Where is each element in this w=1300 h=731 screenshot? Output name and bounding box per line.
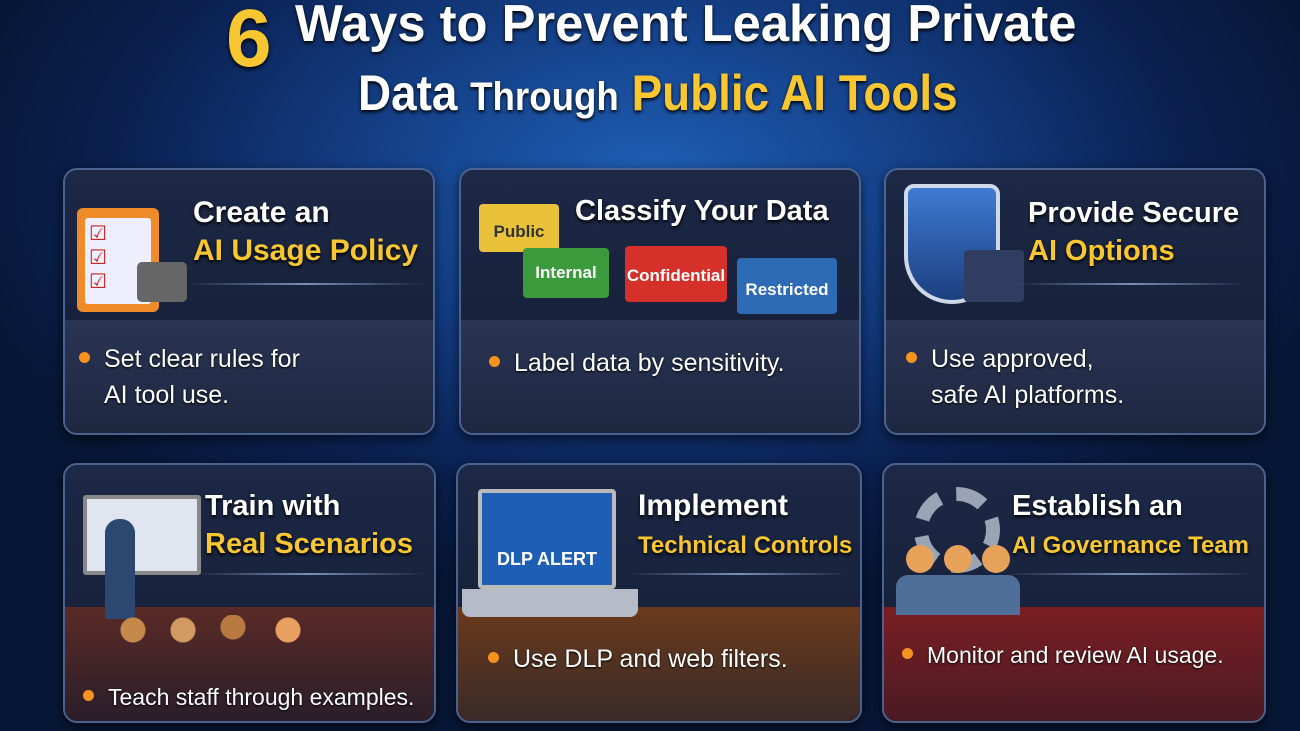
icon: folders: Internal (535, 263, 597, 282)
panel: secure AI options: Use approved, (931, 345, 1094, 373)
icon: folders (479, 204, 837, 314)
panel: governance team: Monitor and review AI usage. (927, 642, 1224, 668)
icon: shield (904, 184, 1024, 304)
icon: clipboard (77, 208, 187, 312)
panel: create policy: Create an (193, 196, 330, 229)
panel: create policy: Set clear rules for (104, 345, 300, 373)
panel: governance team (882, 463, 1266, 723)
panel: technical controls: Technical Controls (638, 532, 852, 559)
panel: secure AI options: safe AI platforms. (931, 381, 1124, 409)
panel: train: Teach staff through examples. (108, 684, 414, 710)
panel: create policy: AI Usage Policy (193, 234, 418, 267)
panel: governance team: Establish an (1012, 490, 1183, 522)
panel: train (63, 463, 436, 723)
panel: train: Real Scenarios (205, 528, 413, 560)
panel: secure AI options: Provide Secure (1028, 197, 1239, 229)
panel: create policy: AI tool use. (104, 381, 229, 409)
panel: governance team: AI Governance Team (1012, 532, 1249, 559)
icon: clipboard: ☑ (89, 247, 107, 269)
icon: laptop DLP alert (462, 489, 638, 617)
panel: classify data: Label data by sensitivity. (514, 349, 785, 377)
icon: clipboard: ☑ (89, 223, 107, 245)
panel: classify data (459, 168, 861, 435)
panel: technical controls: Implement (638, 489, 788, 522)
icon: gear and team (896, 487, 1020, 615)
panel: technical controls (456, 463, 862, 723)
icon: laptop DLP alert: DLP ALERT (497, 549, 597, 569)
panel: classify data: Classify Your Data (575, 195, 829, 227)
panel: secure AI options (884, 168, 1266, 435)
panel: create policy (63, 168, 435, 435)
icon: folders: Confidential (627, 266, 725, 285)
icon: folders: Restricted (745, 280, 829, 299)
icon: folders: Public (493, 222, 544, 241)
panel: technical controls: Use DLP and web filters. (513, 645, 788, 673)
title (226, 0, 1077, 124)
title: Data Through Public AI Tools (358, 65, 958, 121)
panel: secure AI options: AI Options (1028, 235, 1175, 267)
icon: training (83, 495, 301, 643)
panel: train: Train with (205, 490, 340, 522)
icon: clipboard: ☑ (89, 271, 107, 293)
